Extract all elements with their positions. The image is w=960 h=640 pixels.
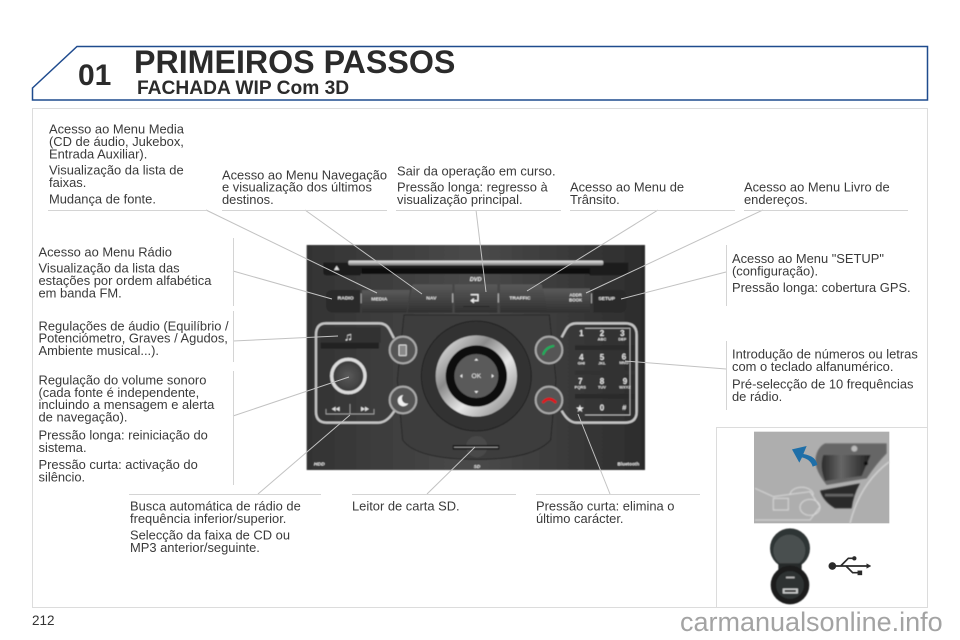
text: exit operation: Pressão longa: regresso à xyxy=(397,180,548,195)
right keypad cluster: DEF xyxy=(618,337,627,342)
text: automatic search: frequência inferior/superior. xyxy=(130,511,286,526)
main content panel xyxy=(32,108,928,608)
text: keypad xyxy=(732,347,918,404)
left control cluster: ♫ xyxy=(344,332,353,344)
text: audio settings: Regulações de áudio (Equilíbrio / xyxy=(38,318,229,333)
right keypad cluster: 2 xyxy=(600,329,605,338)
menu button xyxy=(390,337,416,363)
text: radio menu: estações por ordem alfabética xyxy=(38,273,212,288)
text: setup menu xyxy=(732,251,911,295)
text: volume control xyxy=(38,372,215,485)
call button xyxy=(536,337,562,363)
text: address book menu: Acesso ao Menu Livro de xyxy=(744,180,890,195)
text: short press delete: Pressão curta: elimina o xyxy=(536,499,674,514)
photo: glove box with usb socket xyxy=(754,432,889,523)
text: radio menu: Acesso ao Menu Rádio xyxy=(38,244,172,259)
top button row: NAV xyxy=(426,295,437,301)
bluetooth label: Bluetooth xyxy=(617,461,639,466)
icon: usb symbol xyxy=(829,556,871,575)
text: automatic search: Selecção da faixa de CD ou xyxy=(130,528,290,543)
top button row: SETUP xyxy=(598,296,616,302)
text: automatic search xyxy=(130,499,301,555)
right keypad cluster: MNO xyxy=(619,360,629,365)
top button row: MEDIA xyxy=(371,296,388,302)
hdd label: HDD xyxy=(314,462,325,468)
text: keypad: Introdução de números ou letras xyxy=(732,347,918,362)
text: navigation menu: Acesso ao Menu Navegação xyxy=(222,167,387,182)
central hollow xyxy=(397,315,556,459)
text: setup menu: Pressão longa: cobertura GPS. xyxy=(732,280,911,295)
text: navigation menu: destinos. xyxy=(222,192,274,207)
text: volume control: de navegação). xyxy=(38,410,127,425)
right keypad cluster: 3 xyxy=(620,329,625,338)
text: media menu: Acesso ao Menu Media xyxy=(49,122,185,137)
panel: usb inset xyxy=(716,428,928,608)
right keypad cluster: ABC xyxy=(598,337,606,342)
subtitle: FACHADA WIP Com 3D xyxy=(137,78,349,99)
right keypad cluster: 7 xyxy=(578,377,583,386)
text: address book menu: endereços. xyxy=(744,192,808,207)
text: audio settings: Potenciómetro, Graves / Agudos, xyxy=(38,331,228,346)
text: traffic menu: Acesso ao Menu de xyxy=(570,180,684,195)
right keypad cluster: PQRS xyxy=(575,385,586,390)
text: media menu: Mudança de fonte. xyxy=(49,192,156,207)
text: exit operation: Sair da operação em curso. xyxy=(397,163,556,178)
right keypad cluster: 4 xyxy=(579,353,584,362)
text: keypad: com o teclado alfanumérico. xyxy=(732,359,893,374)
right keypad cluster: 0 xyxy=(600,404,605,413)
chapter number: 01 xyxy=(78,59,111,92)
leader lines xyxy=(206,210,763,494)
text: volume control: (cada fonte é independente, xyxy=(38,385,199,400)
text: navigation menu xyxy=(222,167,387,207)
text: sd reader: Leitor de carta SD. xyxy=(352,499,460,514)
right keypad cluster xyxy=(562,323,637,423)
right keypad cluster: WXYZ xyxy=(619,385,631,390)
text: traffic menu xyxy=(570,180,684,207)
text: volume control: Pressão longa: reiniciação do xyxy=(38,427,208,442)
text: radio menu: Visualização da lista das xyxy=(38,261,180,276)
top button row: RADIO xyxy=(338,296,354,302)
dark mode button xyxy=(390,387,416,413)
text: keypad: Pré-selecção de 10 frequências xyxy=(732,377,914,392)
right keypad cluster: 9 xyxy=(623,377,628,386)
text: automatic search: Busca automática de rádio de xyxy=(130,499,301,514)
right keypad cluster: 8 xyxy=(600,377,605,386)
right keypad cluster: 5 xyxy=(600,353,605,362)
right keypad cluster: 6 xyxy=(622,352,627,361)
text: media menu: Visualização da lista de xyxy=(49,163,184,178)
text: setup menu: (configuração). xyxy=(732,263,818,278)
text: audio settings xyxy=(38,318,229,358)
text: short press delete: último carácter. xyxy=(536,511,624,526)
dvd logo: DVD xyxy=(470,277,482,283)
header banner xyxy=(32,46,928,100)
text: traffic menu: Trânsito. xyxy=(570,192,620,207)
right keypad cluster: JKL xyxy=(598,361,606,366)
text: volume control: sistema. xyxy=(38,440,87,455)
title: PRIMEIROS PASSOS xyxy=(134,44,455,80)
text: exit operation xyxy=(397,163,556,207)
text: short press delete xyxy=(536,499,674,526)
right keypad cluster: # xyxy=(622,403,626,412)
top button row: BOOK xyxy=(569,298,583,303)
left control cluster xyxy=(316,323,395,423)
sd slot: SD xyxy=(474,464,481,469)
text: address book menu xyxy=(744,180,890,207)
text: audio settings: Ambiente musical...). xyxy=(38,343,159,358)
cd slot xyxy=(323,261,628,275)
text: radio menu: em banda FM. xyxy=(38,285,122,300)
right keypad cluster: 1 xyxy=(579,329,584,338)
top button row xyxy=(326,284,627,313)
text: radio menu xyxy=(38,244,212,300)
text: navigation menu: e visualização dos últimos xyxy=(222,180,372,195)
top button row: TRAFFIC xyxy=(509,295,531,301)
top button row: ADDR xyxy=(569,293,583,298)
text: volume control: silêncio. xyxy=(38,470,85,485)
hang up button xyxy=(536,387,562,413)
right keypad cluster: GHI xyxy=(578,361,585,366)
text: media menu: faixas. xyxy=(49,175,86,190)
photo: usb port with cover xyxy=(770,528,810,604)
right keypad cluster: TUV xyxy=(598,385,606,390)
text: volume control: incluindo a mensagem e alerta xyxy=(38,397,215,412)
text: keypad: de rádio. xyxy=(732,389,782,404)
page number: 212 xyxy=(32,613,55,628)
panel: radio front xyxy=(307,245,645,470)
text: volume control: Regulação do volume sonoro xyxy=(38,372,206,387)
text: automatic search: MP3 anterior/seguinte. xyxy=(130,540,260,555)
text: exit operation: visualização principal. xyxy=(397,192,523,207)
text: media menu: Entrada Auxiliar). xyxy=(49,146,147,161)
watermark: carmanualsonline.info xyxy=(680,607,943,637)
central dial xyxy=(421,321,531,431)
sd slot xyxy=(453,436,499,469)
text: setup menu: Acesso ao Menu "SETUP" xyxy=(732,251,884,266)
text: media menu xyxy=(49,122,185,207)
text: media menu: (CD de áudio, Jukebox, xyxy=(49,134,184,149)
text: volume control: Pressão curta: activação do xyxy=(38,457,198,472)
central dial: OK xyxy=(472,373,482,380)
right keypad cluster: ★ xyxy=(576,404,585,414)
